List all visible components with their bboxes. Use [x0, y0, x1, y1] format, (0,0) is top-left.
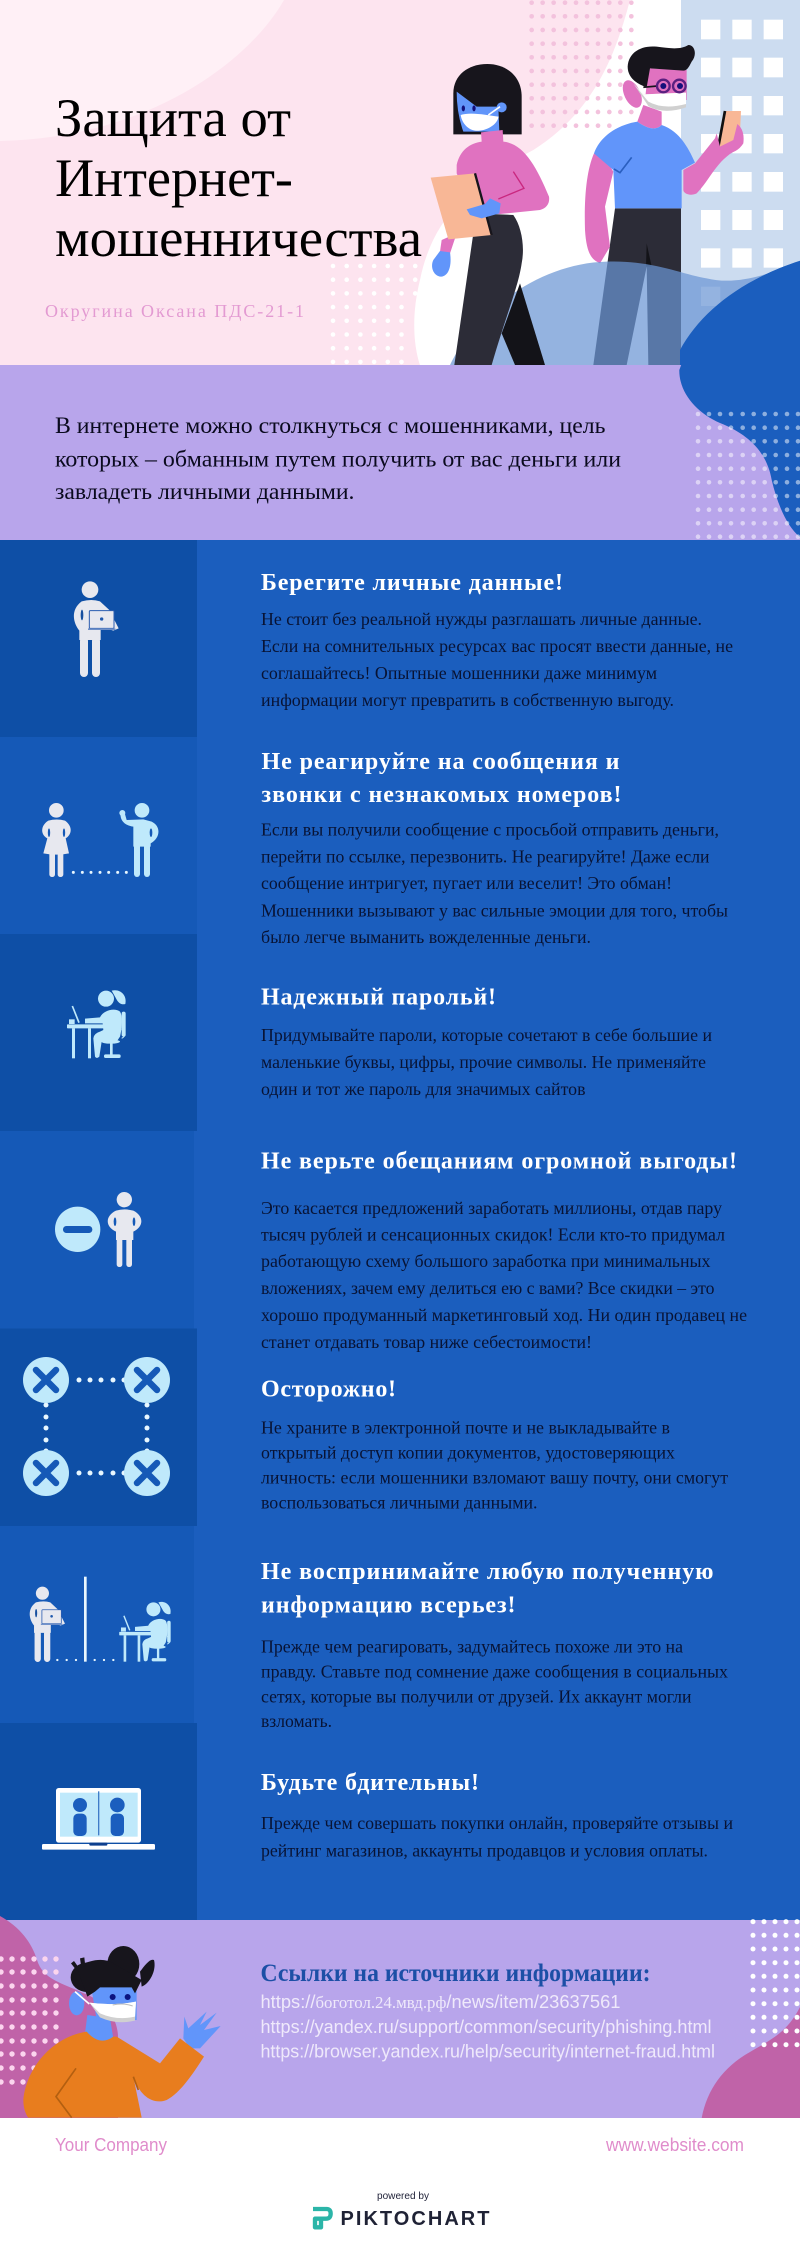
intro text	[55, 413, 621, 504]
tip 5: открытый доступ копии документов, удостоверяющих	[261, 1442, 675, 1462]
tip 1: Если на сомнительных ресурсах вас просят ввести данные, не	[261, 636, 733, 656]
tip 4: работающую схему большого заработка при минимальных	[261, 1251, 711, 1271]
tip 1: Не стоит без реальной нужды разглашать личные данные.	[261, 609, 702, 629]
author line: Округина Оксана ПДС-21-1	[45, 301, 304, 321]
tip 6: Не воспринимайте любую полученную	[261, 1559, 714, 1585]
man figure	[585, 45, 744, 365]
tip 4: станет отдавать товар ниже себестоимости!	[261, 1332, 592, 1352]
tip 2: сообщение интригует, пугает или веселит! Это обман!	[261, 873, 672, 893]
icon: person and desk worker separated by line	[30, 1577, 171, 1662]
tip 4: Не верьте обещаниям огромной выгоды!	[261, 1148, 737, 1174]
icon: four crossed circles connected by dots	[23, 1357, 170, 1496]
title: Интернет-	[55, 148, 293, 208]
icon: person with laptop	[74, 581, 119, 677]
tip 4	[261, 1148, 747, 1352]
blob: top right blue	[680, 240, 800, 365]
footer: piktochart logo: powered by	[377, 2190, 430, 2202]
sources text: https://yandex.ru/support/common/security/phishing.html	[260, 2016, 712, 2037]
tip 7	[261, 1770, 733, 1860]
footer: piktochart logo	[313, 2190, 490, 2230]
panel: tips background	[0, 540, 800, 1920]
tip 5: воспользоваться личными данными.	[261, 1492, 538, 1512]
sources text: https://browser.yandex.ru/help/security/internet-fraud.html	[260, 2041, 715, 2062]
tip 5: Не храните в электронной почте и не выкладывайте в	[261, 1418, 670, 1438]
tip 2: Не реагируйте на сообщения и	[262, 749, 620, 775]
woman figure	[431, 64, 549, 365]
tip 6: сетях, которые вы получили от друзей. Их аккаунт могли	[261, 1686, 692, 1706]
tip 6: взломать.	[261, 1711, 332, 1731]
tip 6: Прежде чем реагировать, задумайтесь похоже ли это на	[261, 1636, 683, 1656]
translucent wave	[450, 262, 773, 365]
tip 7: Прежде чем совершать покупки онлайн, проверяйте отзывы и	[261, 1813, 733, 1833]
tip 2: Мошенники вызывают у вас сильные эмоции для того, чтобы	[261, 900, 728, 920]
tip 4: Это касается предложений заработать миллионы, отдав пару	[261, 1198, 722, 1218]
tip 6: информацию всерьез!	[261, 1592, 516, 1618]
footer: piktochart logo: PIKTOCHART	[340, 2208, 490, 2230]
tip 4: тысяч рублей и сенсационных скидок! Если кто-то придумал	[261, 1224, 725, 1244]
tip 1: Берегите личные данные!	[261, 570, 563, 596]
tip 3: один и тот же пароль для значимых сайтов	[261, 1079, 586, 1099]
tip 5: личность: если мошенники взломают вашу почту, они смогут	[261, 1468, 728, 1488]
tip 3: маленькие буквы, цифры, прочие символы. Не применяйте	[261, 1052, 706, 1072]
tip 6: правду. Ставьте под сомнение даже сообщения в социальных	[261, 1662, 728, 1682]
footer: website: www.website.com	[605, 2134, 744, 2155]
icon: woman and man with dotted line	[42, 803, 158, 877]
tip 2: Если вы получили сообщение с просьбой отправить деньги,	[261, 820, 719, 840]
sources text	[260, 1960, 715, 2062]
sources text: https://боготол.24.мвд.рф/news/item/23637561	[260, 1991, 620, 2012]
tip 6	[261, 1559, 728, 1731]
tip 5: Осторожно!	[261, 1376, 396, 1402]
title: мошенничества	[55, 208, 422, 268]
sources text: Ссылки на источники информации:	[260, 1960, 650, 1987]
illustration: waving man in mask	[23, 1946, 221, 2118]
icon: minus circle and person	[55, 1192, 141, 1267]
tip 3	[261, 984, 712, 1099]
tip 5	[261, 1376, 728, 1512]
tip 2: было легче выманить вожделенные деньги.	[261, 927, 591, 947]
tip 2: перейти по ссылке, перезвонить. Не реагируйте! Даже если	[261, 846, 710, 866]
footer: company name: Your Company	[55, 2134, 168, 2155]
panel: intro band	[0, 240, 800, 540]
tip 3: Надежный парольй!	[261, 984, 496, 1010]
panel: sources band	[0, 1916, 800, 2118]
tip 2: звонки с незнакомых номеров!	[262, 782, 622, 808]
intro text: завладеть личными данными.	[55, 479, 355, 504]
title: Защита от	[55, 88, 291, 148]
icon: woman at desk	[67, 990, 126, 1058]
title	[55, 88, 422, 268]
tip 1: информации могут превратить в собственную выгоду.	[261, 690, 674, 710]
tip 2	[261, 749, 728, 947]
tip 3: Придумывайте пароли, которые сочетают в себе большие и	[261, 1025, 712, 1045]
tip 7: Будьте бдительны!	[261, 1770, 479, 1796]
tip 4: вложениях, зачем ему делиться ею с вами? Все скидки – это	[261, 1278, 715, 1298]
tip 7: рейтинг магазинов, аккаунты продавцов и условия оплаты.	[261, 1840, 708, 1860]
tip 1	[261, 570, 733, 710]
illustration: woman and man in masks	[431, 45, 773, 365]
intro text: которых – обманным путем получить от вас деньги или	[55, 446, 621, 472]
panel: header background	[0, 0, 800, 365]
tip 4: хорошо продуманный маркетинговый ход. Ни один продавец не	[261, 1305, 747, 1325]
intro text: В интернете можно столкнуться с мошенниками, цель	[55, 413, 606, 438]
icon: laptop video call	[42, 1788, 155, 1850]
tip 1: соглашайтесь! Опытные мошенники даже минимум	[261, 663, 657, 683]
